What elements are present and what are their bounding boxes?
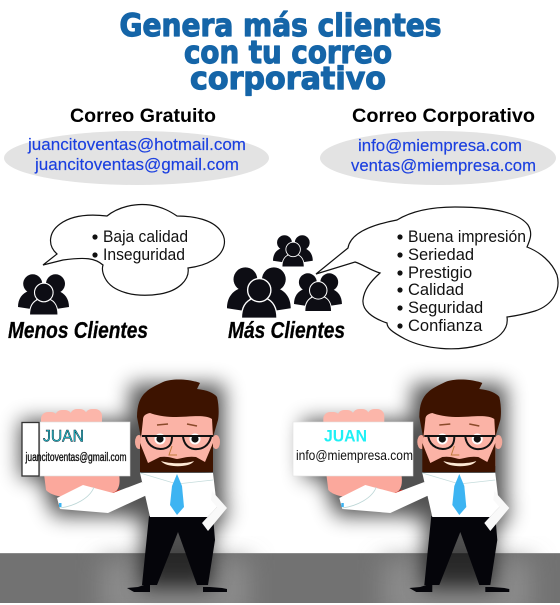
bullets: menos clientes — [92, 228, 188, 264]
business card: corporativo: info@miempresa.com — [296, 447, 413, 463]
title: con tu correo — [184, 35, 392, 71]
icon: people top — [273, 235, 313, 267]
bullets: mas clientes: Calidad — [408, 281, 464, 299]
man with card: gratuito — [20, 379, 232, 592]
label: menos clientes: Menos Clientes — [8, 317, 148, 343]
character — [20, 379, 232, 592]
title — [120, 8, 442, 97]
emails: corporativo — [351, 137, 536, 175]
emails: gratuito: juancitoventas@hotmail.com — [27, 136, 246, 154]
floor highlight right — [382, 560, 532, 605]
email ellipse: corporativo — [320, 131, 556, 185]
heading: correo corporativo: Correo Corporativo — [352, 105, 535, 127]
speech bubble: mas clientes — [316, 207, 558, 349]
speech bubble: menos clientes — [43, 204, 224, 295]
bullets: mas clientes: Seguridad — [408, 299, 483, 317]
floor — [0, 553, 560, 603]
title: Genera más clientes — [120, 8, 442, 44]
emails: gratuito: juancitoventas@gmail.com — [34, 156, 239, 174]
bullets: menos clientes: Inseguridad — [103, 246, 185, 264]
title: corporativo — [190, 61, 386, 97]
heading: correo gratuito: Correo Gratuito — [70, 105, 216, 127]
panel: correo gratuito — [4, 105, 269, 185]
label: mas clientes: Más Clientes — [228, 317, 345, 343]
icon: few people — [18, 274, 69, 315]
emails: corporativo: info@miempresa.com — [358, 137, 522, 155]
icon: people large — [227, 267, 291, 318]
floor highlight left — [100, 560, 250, 605]
bullets: mas clientes: Seriedad — [408, 246, 474, 264]
bullets: mas clientes: Prestigio — [408, 264, 472, 282]
business card: corporativo: JUAN — [324, 426, 367, 446]
bullets: mas clientes — [397, 228, 526, 335]
man with card: corporativo — [293, 379, 514, 592]
emails: corporativo: ventas@miempresa.com — [351, 157, 536, 175]
bullets: mas clientes: Confianza — [408, 317, 483, 335]
icon: people right — [294, 273, 342, 312]
business card: gratuito: JUAN — [43, 426, 84, 446]
bullets: menos clientes: Baja calidad — [103, 228, 188, 246]
business card: corporativo — [293, 422, 413, 476]
bullets: mas clientes: Buena impresión — [408, 228, 526, 246]
emails: gratuito — [27, 136, 246, 174]
panel: correo corporativo — [320, 105, 556, 185]
business card: gratuito — [22, 422, 130, 476]
email ellipse: gratuito — [4, 131, 269, 185]
character — [302, 379, 514, 592]
business card: gratuito: juancitoventas@gmail.com — [25, 452, 127, 464]
